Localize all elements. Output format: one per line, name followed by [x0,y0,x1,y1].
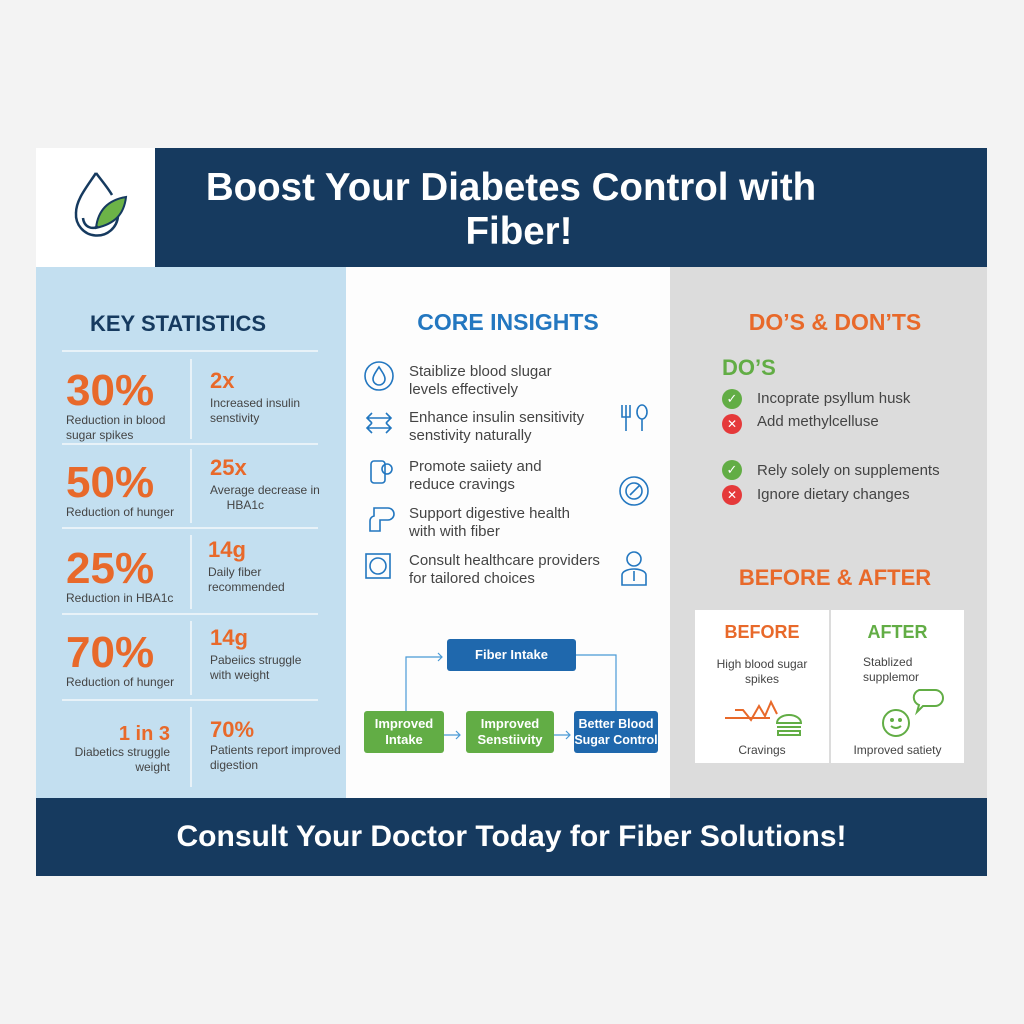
stat 14g weight: with weight [210,668,269,682]
stat 50%: Reduction of hunger [66,505,174,519]
stat 50% [66,458,174,519]
do/don't list: ✕ [727,488,737,502]
do/don't list: Add methylcelluse [757,413,879,430]
stat 14g weight: 14g [210,625,248,650]
card: before: Cravings [738,743,786,757]
header title: Fiber! [466,210,572,253]
stat 25% [66,544,173,605]
box: fiber intake: Fiber Intake [475,647,548,662]
card: before: High blood sugar [717,657,807,671]
panel: key statistics [36,267,346,798]
stat 30%: Reduction in blood [66,413,165,427]
icon: spike chart and burger [725,700,802,736]
header title [155,148,987,267]
stat 14g weight [210,625,301,682]
do/don't list [722,389,940,505]
insight text [409,363,552,398]
insight list: with with fiber [409,523,500,540]
stat 25%: 25% [66,544,154,593]
card: after: AFTER [868,622,928,642]
stat 25%: Reduction in HBA1c [66,591,173,605]
stat 2x: senstivity [210,411,259,425]
do/don't list: ✓ [727,391,737,406]
box: improved intake: Improved [375,716,433,731]
card: before [695,610,829,763]
do/don't list: Ignore dietary changes [757,486,910,503]
panel: do's and don'ts [670,267,987,798]
stat 2x [210,368,300,425]
do/don't list: Incoprate psyllum husk [757,390,910,407]
heading: do's & don'ts: DO’S & DON’TS [749,309,921,335]
stat 70% digestion: 70% [210,717,254,742]
do/don't list: ✓ [727,462,737,477]
heading: key statistics: KEY STATISTICS [90,311,266,336]
card: after: Stablized [863,655,912,669]
stat 30%: sugar spikes [66,428,133,442]
icon: smiley with speech bubble [882,689,944,737]
stat 70% digestion: Patients report improved [210,743,341,757]
box: improved intake [364,711,444,753]
stat 1 in 3: 1 in 3 [119,723,170,745]
box: better blood sugar control [574,711,658,753]
stat 30%: 30% [66,366,154,415]
footer banner [36,798,987,876]
box: better blood sugar control: Better Blood [578,717,654,731]
box: improved sensitivity: Improved [481,716,539,731]
stat 25x: HBA1c [227,498,264,512]
stat 14g daily [208,537,285,594]
stat 14g daily: 14g [208,537,246,562]
stat 70%: 70% [66,628,154,677]
heading: core insights: CORE INSIGHTS [417,309,599,335]
panel: core insights [346,267,670,798]
stat 70%: Reduction of hunger [66,675,174,689]
insight text: Staiblize blood slugar [409,363,552,380]
insight list: Promote saiiety and [409,458,542,475]
header logo box [36,148,155,267]
card: before: spikes [745,672,779,686]
insight text: levels effectively [409,381,518,398]
stat 25x: 25x [210,455,247,480]
card: after [831,610,964,763]
flow diagram [364,639,658,753]
stat 14g daily: recommended [208,580,285,594]
card: after: Improved satiety [853,743,942,757]
stat 25x [210,455,320,512]
stat 1 in 3: weight [135,760,170,774]
card: before: BEFORE [724,622,800,642]
box: better blood sugar control: Sugar Control [574,733,658,747]
do/don't list: Rely solely on supplements [757,462,940,479]
box: improved intake: Intake [385,732,423,747]
stat 25x: Average decrease in [210,483,320,497]
insight list: Enhance insulin sensitivity [409,409,584,426]
stat 70% digestion [210,717,341,772]
icon: drop with leaf [74,172,128,237]
stat 2x: Increased insulin [210,396,300,410]
insight list: senstivity naturally [409,427,532,444]
stat 14g daily: Daily fiber [208,565,261,579]
box: fiber intake [447,639,576,671]
insight list: reduce cravings [409,476,515,493]
insight list: for tailored choices [409,570,535,587]
stat 1 in 3: Diabetics struggle [75,745,170,759]
stat 30% [66,366,165,442]
card: after: supplemor [863,670,919,684]
box: improved sensitivity: Senstiivity [477,732,543,747]
stat 2x: 2x [210,368,234,393]
header title: Boost Your Diabetes Control with [206,166,816,209]
insight list [364,361,649,587]
stat 50%: 50% [66,458,154,507]
stat 1 in 3 [75,723,170,774]
insight list: Support digestive health [409,505,570,522]
stat 70% [66,628,174,689]
box: improved sensitivity [466,711,554,753]
subheading: do's: DO’S [722,355,776,380]
do/don't list: ✕ [727,417,737,431]
stat 70% digestion: digestion [210,758,258,772]
stat 14g weight: Pabeiics struggle [210,653,301,667]
heading: before & after: BEFORE & AFTER [739,565,931,590]
insight list: Consult healthcare providers [409,552,600,569]
footer banner: Consult Your Doctor Today for Fiber Solutions! [176,820,846,853]
